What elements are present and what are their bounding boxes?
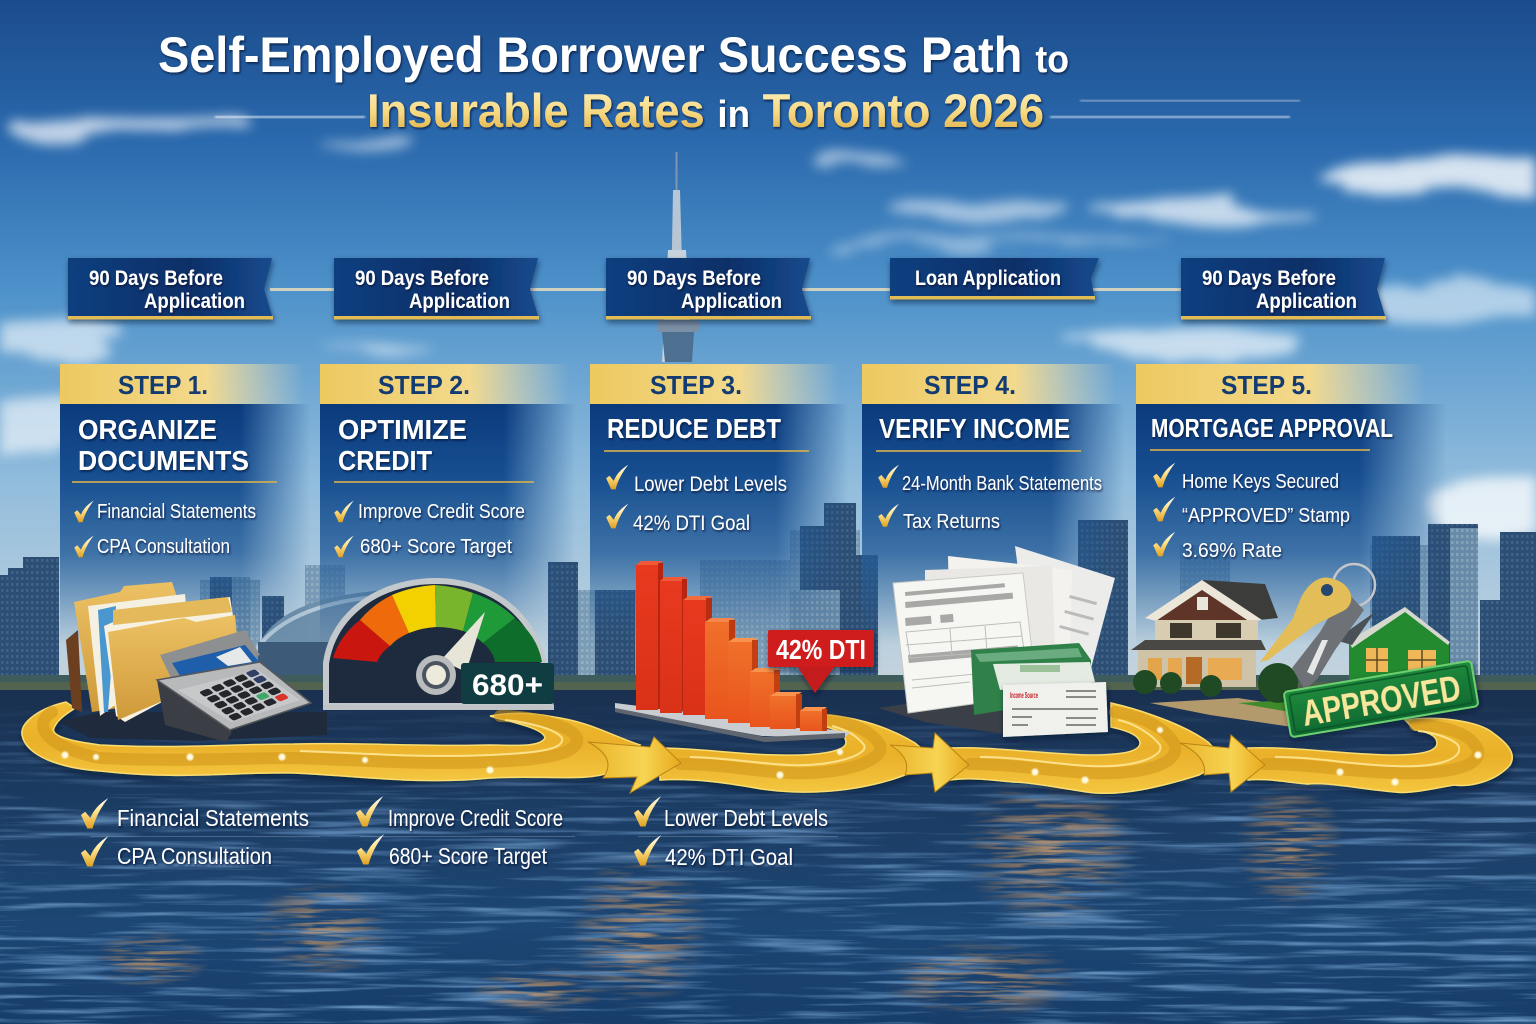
- panel: step 2: [320, 364, 575, 644]
- arrow 1: [588, 737, 681, 793]
- bottom checklist: step 1: [81, 798, 320, 869]
- title: Self-Employed Borrower Success Path to: [158, 27, 1069, 83]
- Toronto skyline: [0, 503, 1536, 691]
- panel: step 5: MORTGAGE APPROVAL: [1151, 413, 1393, 443]
- banner: step 3 timing: Application: [681, 290, 782, 313]
- panel: step 4: 24-Month Bank Statements: [902, 473, 1102, 495]
- title: [158, 27, 1069, 137]
- banner: step 5 timing: [1181, 258, 1386, 320]
- banner: step 5 timing: 90 Days Before: [1202, 267, 1336, 290]
- icon: income documents: Income Source: [1010, 691, 1038, 700]
- panel: step 2: Improve Credit Score: [358, 501, 525, 523]
- icon: income documents: [878, 546, 1115, 737]
- panel: step 1: STEP 1.: [118, 370, 208, 400]
- 680+ badge: [461, 663, 554, 704]
- panel: step 4: [862, 364, 1124, 644]
- icon: keys and green house: [1260, 564, 1450, 700]
- bottom checklist: step 3: [634, 796, 838, 870]
- clouds: [0, 113, 1536, 540]
- banner: step 2 timing: 90 Days Before: [355, 267, 489, 290]
- panel: step 1: [60, 364, 310, 644]
- icon: credit gauge 680+: [323, 578, 554, 710]
- panel: step 1: Financial Statements: [97, 501, 256, 523]
- banner: step 1 timing: [68, 258, 273, 320]
- panel: step 2: OPTIMIZE: [338, 414, 467, 445]
- bottom checklist: step 3: 42% DTI Goal: [665, 844, 793, 870]
- panel: step 5: STEP 5.: [1221, 370, 1312, 400]
- bottom checklist: step 1: Financial Statements: [117, 805, 309, 831]
- banner: step 4 timing: [890, 258, 1099, 300]
- gold success path: [22, 702, 1512, 793]
- panel: step 2: STEP 2.: [378, 370, 470, 400]
- path sparkles: [62, 727, 1482, 786]
- panel: step 3: REDUCE DEBT: [607, 413, 781, 444]
- panel: step 1: DOCUMENTS: [78, 445, 249, 476]
- banner: step 1 timing: Application: [144, 290, 245, 313]
- panel: step 1: CPA Consultation: [97, 536, 230, 558]
- panel: step 4: STEP 4.: [924, 370, 1016, 400]
- panel: step 5: Home Keys Secured: [1182, 471, 1339, 493]
- CN Tower: [657, 152, 699, 362]
- icon: folders and calculator: [58, 582, 327, 742]
- icon: house: [1131, 580, 1298, 727]
- bottom checklist: step 2: Improve Credit Score: [388, 805, 563, 831]
- 42% DTI callout: 42% DTI: [776, 634, 866, 665]
- arrow 3: [1180, 735, 1265, 792]
- cloud streaks: [215, 100, 1300, 118]
- panel: step 1: ORGANIZE: [78, 414, 217, 445]
- panel: step 3: STEP 3.: [650, 370, 742, 400]
- calculator: [157, 630, 311, 742]
- banner: step 1 timing: 90 Days Before: [89, 267, 223, 290]
- sky background: [0, 0, 1536, 700]
- title: Insurable Rates in Toronto 2026: [367, 84, 1044, 137]
- panel: step 3: Lower Debt Levels: [634, 473, 787, 496]
- dome stadium: [256, 590, 385, 680]
- panel: step 4: Tax Returns: [903, 511, 1000, 533]
- bottom checklist: step 2: [356, 796, 575, 869]
- arrow 2: [890, 733, 969, 792]
- banner: step 2 timing: Application: [409, 290, 510, 313]
- icon: credit gauge 680+: 680+: [472, 669, 543, 702]
- water: [0, 690, 1536, 1024]
- panel: step 5: [1136, 364, 1446, 644]
- bottom checklist: step 3: Lower Debt Levels: [664, 805, 828, 831]
- panel: step 3: [590, 364, 848, 644]
- gauge needle: [441, 612, 485, 672]
- panel: step 3: 42% DTI Goal: [633, 512, 750, 535]
- panel: step 2: 680+ Score Target: [360, 536, 512, 558]
- banner: step 2 timing: [334, 258, 539, 320]
- banner: step 3 timing: 90 Days Before: [627, 267, 761, 290]
- panel: step 4: VERIFY INCOME: [879, 413, 1070, 444]
- banner: step 3 timing: [606, 258, 811, 320]
- bottom checklist: step 2: 680+ Score Target: [389, 843, 548, 869]
- icon: falling debt bars: [615, 561, 874, 742]
- approved stamp: APPROVED: [1299, 667, 1464, 734]
- 42% DTI callout: [768, 630, 874, 693]
- panel: step 5: 3.69% Rate: [1182, 540, 1282, 562]
- panel: step 5: “APPROVED” Stamp: [1182, 505, 1350, 527]
- banner: step 4 timing: Loan Application: [915, 267, 1061, 290]
- timeline connector: [270, 288, 1190, 291]
- banner: step 5 timing: Application: [1256, 290, 1357, 313]
- panel: step 2: CREDIT: [338, 445, 432, 476]
- bottom checklist: step 1: CPA Consultation: [117, 843, 272, 869]
- water reflections: [0, 700, 1536, 1024]
